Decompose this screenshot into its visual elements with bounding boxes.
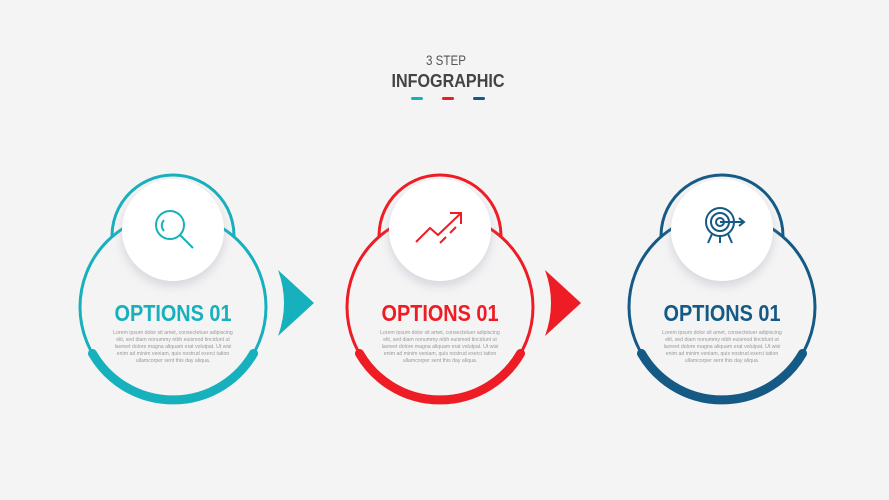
- icon: target: [706, 208, 744, 243]
- text block 2: laoreet dolore magna aliquam erat volutpat. Ut wisi: [382, 344, 498, 350]
- text block 1: laoreet dolore magna aliquam erat volutpat. Ut wisi: [115, 344, 231, 350]
- text block 1: [113, 330, 233, 364]
- icon: growth arrow: [416, 213, 461, 243]
- text block 2: elit, sed diam nonummy nibh euismod tincidunt ut: [383, 337, 497, 343]
- text block 2: Lorem ipsum dolor sit amet, consectetuer adipiscing: [380, 330, 500, 336]
- text block 3: enim ad minim veniam, quis nostrud exerci tation: [666, 351, 778, 357]
- text block 3: [662, 330, 782, 364]
- heading: options 2: OPTIONS 01: [382, 300, 499, 326]
- heading: options 1: OPTIONS 01: [114, 300, 232, 326]
- text block 2: [380, 330, 500, 364]
- title: 3 STEP: [426, 52, 466, 68]
- panel: step 1: [80, 175, 266, 400]
- text block 2: enim ad minim veniam, quis nostrud exerci tation: [384, 351, 496, 357]
- text block 2: ullamcorper sent this day aliqua.: [403, 358, 477, 364]
- text block 3: elit, sed diam nonummy nibh euismod tincidunt ut: [665, 337, 779, 343]
- text block 3: ullamcorper sent this day aliqua.: [685, 358, 759, 364]
- heading: options 3: OPTIONS 01: [664, 300, 781, 326]
- arrow 1: [278, 270, 314, 336]
- panel: step 2: [347, 175, 533, 400]
- text block 1: Lorem ipsum dolor sit amet, consectetuer adipiscing: [113, 330, 233, 336]
- text block 3: Lorem ipsum dolor sit amet, consectetuer adipiscing: [662, 330, 782, 336]
- panel: step 3: [629, 175, 815, 400]
- icon: magnifier: [156, 211, 193, 248]
- text block 1: enim ad minim veniam, quis nostrud exerci tation: [117, 351, 229, 357]
- text block 1: elit, sed diam nonummy nibh euismod tincidunt ut: [116, 337, 230, 343]
- text block 3: laoreet dolore magna aliquam erat volutpat. Ut wisi: [664, 344, 780, 350]
- title: [392, 52, 505, 100]
- arrow 2: [545, 270, 581, 336]
- text block 1: ullamcorper sent this day aliqua.: [136, 358, 210, 364]
- title: INFOGRAPHIC: [392, 71, 505, 91]
